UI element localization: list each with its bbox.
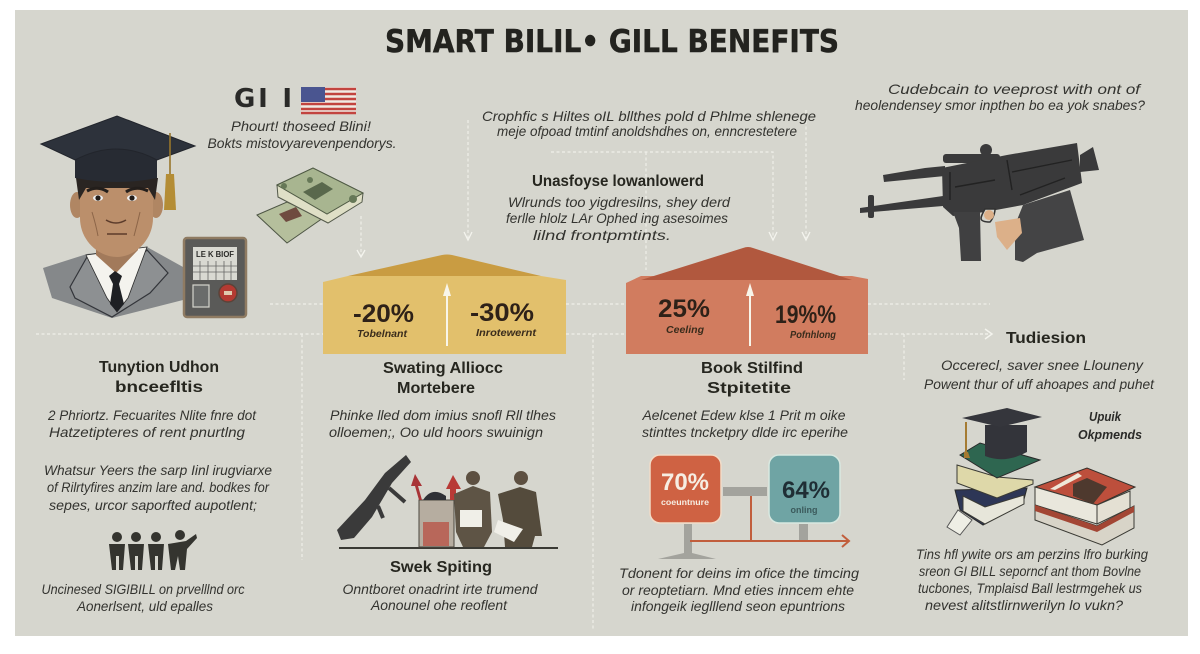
text: top right: heolendensey smor inpthen bo ea yok snabes?: [855, 97, 1145, 113]
text: chart description: Tdonent for deins im ofice the timcing: [619, 565, 859, 581]
text: top right: Cudebcain to veeprost with ont of: [888, 81, 1143, 97]
text: center top: meje ofpoad tmtinf anoldshdhes on, enncrestetere: [497, 123, 797, 139]
column 2: swating allioce: Swating Alliocc: [383, 360, 503, 377]
column 1: tuition: Aonerlsent, uld epalles: [76, 598, 213, 614]
icon: soldiers with rifle and crate: [337, 455, 558, 548]
column 1: tuition: of Rilrtyfires anzim lare and. bodkes for: [47, 479, 270, 495]
text: column 4 closing: sreon GI BILL seporncf ant thom Bovlne: [919, 563, 1141, 579]
chart: 70% and 64% boxes: onling: [790, 505, 818, 515]
column 1: tuition: Tunytion Udhon: [99, 359, 219, 376]
text: upuik okpmends: Okpmends: [1078, 427, 1142, 442]
text: center top: Crophfic s Hiltes oIL bllthes pold d Phlme shlenege: [482, 108, 816, 124]
column 4: tudiesion: Powent thur of uff ahoapes and puhet: [924, 376, 1155, 392]
panel: red stat card: 19%%: [775, 301, 836, 329]
text: column 4 closing: tucbones, Tmplaisd Ball lestrmgehek us: [918, 580, 1142, 596]
column 3: book stifind: Stpitetite: [707, 380, 791, 397]
panel: red stat card: [626, 247, 868, 354]
icon: calculator: [184, 238, 246, 317]
text: chart description: or reoptetiarn. Mnd eties inncem ehte: [622, 582, 854, 598]
column 1: tuition: sepes, urcor saporfted aupotlent;: [49, 497, 257, 513]
panel: red stat card: Pofnhlong: [790, 330, 836, 341]
column 3: book stifind: stinttes tncketpry dlde irc eperihe: [642, 424, 848, 440]
text: swek spiting description: Onntboret onadrint irte trumend: [342, 581, 539, 597]
text: center description: lilnd frontpmtints.: [533, 227, 671, 243]
column 2: swating allioce: Mortebere: [397, 380, 475, 397]
chart: 70% and 64% boxes: 70%: [661, 469, 709, 496]
title: SMART BILIL• GILL BENEFITS: [385, 24, 839, 60]
icon: rifle with hand: [860, 143, 1099, 262]
text: column 4 closing: Tins hfl ywite ors am perzins lfro burking: [916, 546, 1148, 562]
column 3: book stifind: [642, 360, 848, 440]
chart: 70% and 64% boxes: coeuntnure: [661, 497, 709, 507]
panel: yellow stat card: Inrotewernt: [476, 328, 537, 339]
text: intro: [208, 118, 396, 151]
arrow: to tudiesion: [960, 329, 992, 339]
heading: swek spiting: Swek Spiting: [390, 559, 492, 576]
text: intro: Phourt! thoseed Blini!: [231, 118, 371, 134]
column 2: swating allioce: olloemen;, Oo uld hoors swuinign: [329, 424, 543, 440]
column 4: tudiesion: Tudiesion: [1006, 330, 1086, 347]
text: upuik okpmends: Upuik: [1089, 409, 1122, 424]
text: intro: Bokts mistovyarevenpendorys.: [208, 135, 396, 151]
column 1: tuition: Hatzetipteres of rent pnurtlng: [49, 424, 245, 440]
text: upuik okpmends: [1078, 409, 1142, 442]
panel: yellow stat card: Tobelnant: [357, 329, 408, 340]
column 1: tuition: bnceefltis: [115, 379, 203, 396]
column 1: tuition: Uncinesed SIGIBILL on prvelllnd orc: [42, 581, 244, 597]
column 4: tudiesion: Occerecl, saver snee Llouneny: [941, 357, 1144, 373]
icon: books and graduation cap: [947, 408, 1135, 545]
icon: calculator: LE K BIOF: [196, 250, 234, 259]
panel: yellow stat card: -20%: [353, 300, 414, 328]
column 2: swating allioce: Phinke lled dom imius snofl Rll tlhes: [330, 407, 556, 423]
text: top right: [855, 81, 1145, 113]
text: swek spiting description: Aonounel ohe reoflent: [370, 597, 508, 613]
text: center description: [506, 194, 731, 243]
text: column 4 closing: [916, 546, 1148, 613]
panel: yellow stat card: [323, 254, 566, 354]
column 2: swating allioce: [329, 360, 556, 440]
chart: 70% and 64% boxes: 64%: [782, 477, 830, 504]
text: center description: Wlrunds too yigdresilns, shey derd: [508, 194, 731, 210]
column 1: tuition: [42, 359, 272, 614]
heading: center: Unasfoyse lowanlowerd: [532, 173, 704, 190]
column 1: tuition: 2 Phriortz. Fecuarites Nlite fnre dot: [47, 407, 257, 423]
icon: people group: [109, 530, 197, 570]
text: swek spiting description: [342, 581, 539, 613]
panel: red stat card: 25%: [658, 295, 710, 323]
column 1: tuition: Whatsur Yeers the sarp Iinl irugviarxe: [44, 462, 272, 478]
panel: yellow stat card: -30%: [470, 299, 534, 327]
text: center top: [482, 108, 816, 139]
text: chart description: infongeik ieglllend seon epuntrions: [631, 598, 845, 614]
column 4: tudiesion: [924, 330, 1155, 392]
text: chart description: [619, 565, 859, 614]
icon: cash stacks: [257, 168, 363, 243]
text: column 4 closing: nevest alitstlirnwerilyn lo vukn?: [925, 597, 1123, 613]
panel: red stat card: Ceeling: [666, 325, 704, 336]
text: center description: ferlle hlolz LAr Ophed ing asesoimes: [506, 210, 728, 226]
column 3: book stifind: Book Stilfind: [701, 360, 803, 377]
column 3: book stifind: Aelcenet Edew klse 1 Prit m oike: [642, 407, 846, 423]
heading: GI I: GI I: [234, 84, 292, 114]
icon: graduate man: [41, 116, 195, 318]
chart: 70% and 64% boxes: [650, 455, 849, 559]
icon: US flag: [301, 87, 356, 114]
